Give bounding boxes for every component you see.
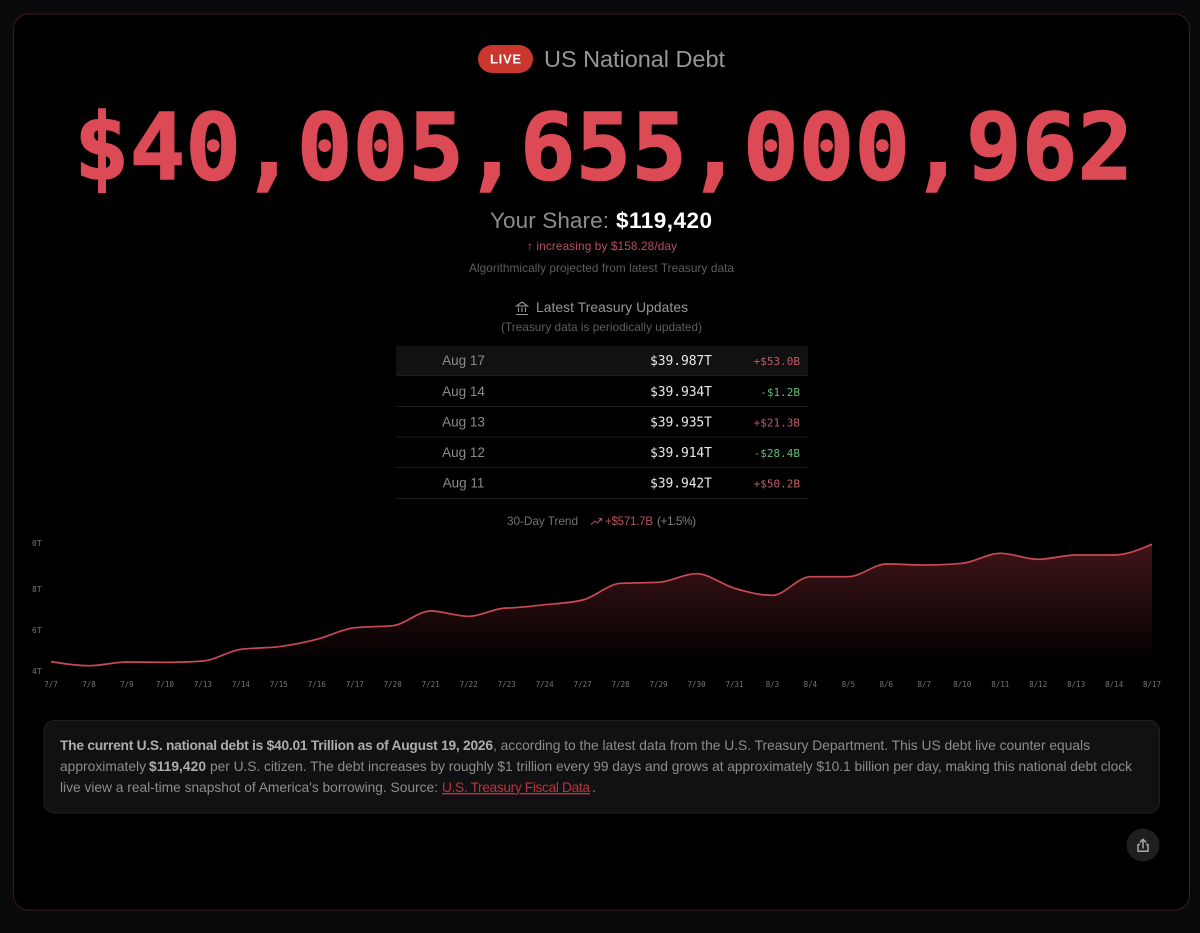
x axis labels: 8/3 bbox=[766, 680, 779, 689]
info box: $119,420 bbox=[149, 759, 206, 774]
30-day trend summary: (+1.5%) bbox=[657, 514, 696, 528]
table values: $39.987T bbox=[650, 354, 712, 369]
y axis labels: 6T bbox=[32, 626, 42, 635]
x axis labels: 7/21 bbox=[422, 680, 440, 689]
table values: $39.934T bbox=[650, 385, 712, 400]
your share bbox=[490, 208, 712, 233]
y axis labels: 0T bbox=[32, 539, 42, 548]
30-day trend summary bbox=[507, 514, 696, 528]
x axis labels: 8/14 bbox=[1105, 680, 1124, 689]
table changes: +$53.0B bbox=[754, 355, 800, 368]
area fill bbox=[51, 544, 1152, 666]
x axis labels: 7/9 bbox=[120, 680, 134, 689]
projection note: Algorithmically projected from latest Treasury data bbox=[469, 261, 734, 275]
table dates: Aug 11 bbox=[443, 476, 484, 490]
info box: per U.S. citizen. The debt increases by roughly $1 trillion every 99 days and grows at approximately $10.1 billion per day, making this national debt clock bbox=[210, 759, 1132, 774]
x axis labels: 8/10 bbox=[953, 680, 972, 689]
info box: . bbox=[592, 780, 596, 795]
x axis labels: 7/27 bbox=[574, 680, 592, 689]
x axis labels: 7/22 bbox=[460, 680, 478, 689]
x axis labels: 8/4 bbox=[804, 680, 818, 689]
y axis labels: 4T bbox=[32, 667, 42, 676]
y axis labels: 8T bbox=[32, 585, 42, 594]
treasury updates table bbox=[396, 346, 808, 498]
info box: The current U.S. national debt is $40.01 Trillion as of August 19, 2026 bbox=[60, 738, 493, 753]
area chart: 30-day debt bbox=[32, 539, 1161, 689]
icon: bank building bbox=[516, 302, 528, 314]
treasury updates heading: Latest Treasury Updates bbox=[536, 300, 688, 315]
info box: live view a real-time snapshot of America's borrowing. Source: bbox=[60, 780, 438, 795]
table values: $39.914T bbox=[650, 446, 712, 461]
x axis labels: 7/20 bbox=[384, 680, 402, 689]
x axis labels: 8/6 bbox=[880, 680, 894, 689]
x axis labels bbox=[44, 680, 1161, 689]
x axis labels: 7/15 bbox=[270, 680, 288, 689]
trend line bbox=[51, 544, 1152, 666]
live badge bbox=[478, 45, 533, 73]
x axis labels: 7/28 bbox=[612, 680, 630, 689]
table dates: Aug 14 bbox=[442, 384, 485, 399]
x axis labels: 7/7 bbox=[44, 680, 58, 689]
table values: $39.942T bbox=[650, 476, 712, 492]
debt counter: $40,005,655,000,962 bbox=[74, 94, 1133, 201]
info box: , according to the latest data from the U.S. Treasury Department. This US debt live counter equals bbox=[493, 738, 1090, 753]
x axis labels: 7/14 bbox=[232, 680, 250, 689]
live badge: LIVE bbox=[490, 52, 521, 66]
x axis labels: 8/5 bbox=[842, 680, 855, 689]
share button bbox=[1126, 828, 1160, 862]
table changes: -$28.4B bbox=[754, 447, 800, 460]
daily increase: ↑ increasing by $158.28/day bbox=[527, 239, 677, 253]
table changes: +$21.3B bbox=[754, 416, 800, 430]
table dates: Aug 12 bbox=[442, 445, 485, 460]
table changes bbox=[754, 355, 800, 490]
your share: Your Share: bbox=[490, 208, 609, 233]
info box: approximately bbox=[60, 759, 146, 774]
x axis labels: 7/30 bbox=[687, 680, 706, 689]
title: US National Debt bbox=[544, 46, 725, 72]
your share: $119,420 bbox=[616, 208, 712, 233]
x axis labels: 7/10 bbox=[156, 680, 174, 689]
icon: trending up bbox=[591, 518, 602, 524]
x axis labels: 8/11 bbox=[991, 680, 1009, 689]
header bbox=[478, 45, 725, 73]
x axis labels: 7/8 bbox=[82, 680, 96, 689]
x axis labels: 7/23 bbox=[498, 680, 516, 689]
table dates bbox=[442, 353, 485, 490]
x axis labels: 8/7 bbox=[918, 680, 931, 689]
x axis labels: 7/29 bbox=[649, 680, 668, 689]
x axis labels: 7/16 bbox=[308, 680, 326, 689]
info box bbox=[44, 720, 1160, 813]
x axis labels: 7/17 bbox=[346, 680, 364, 689]
source link: U.S. Treasury Fiscal Data bbox=[442, 780, 590, 795]
table changes: -$1.2B bbox=[760, 386, 800, 399]
x axis labels: 8/17 bbox=[1143, 680, 1161, 689]
x axis labels: 8/12 bbox=[1029, 680, 1047, 689]
x axis labels: 7/13 bbox=[194, 680, 212, 689]
y axis labels bbox=[32, 539, 42, 676]
table values: $39.935T bbox=[650, 416, 712, 430]
30-day trend summary: 30-Day Trend bbox=[507, 514, 578, 528]
x axis labels: 8/13 bbox=[1067, 680, 1085, 689]
icon: share bbox=[1138, 839, 1148, 851]
x axis labels: 7/31 bbox=[725, 680, 744, 689]
table changes: +$50.2B bbox=[754, 478, 800, 490]
30-day trend summary: +$571.7B bbox=[605, 516, 653, 528]
table values bbox=[650, 354, 712, 492]
x axis labels: 7/24 bbox=[536, 680, 554, 689]
table dates: Aug 17 bbox=[442, 353, 485, 368]
table dates: Aug 13 bbox=[442, 414, 485, 430]
treasury update note: (Treasury data is periodically updated) bbox=[501, 320, 702, 334]
